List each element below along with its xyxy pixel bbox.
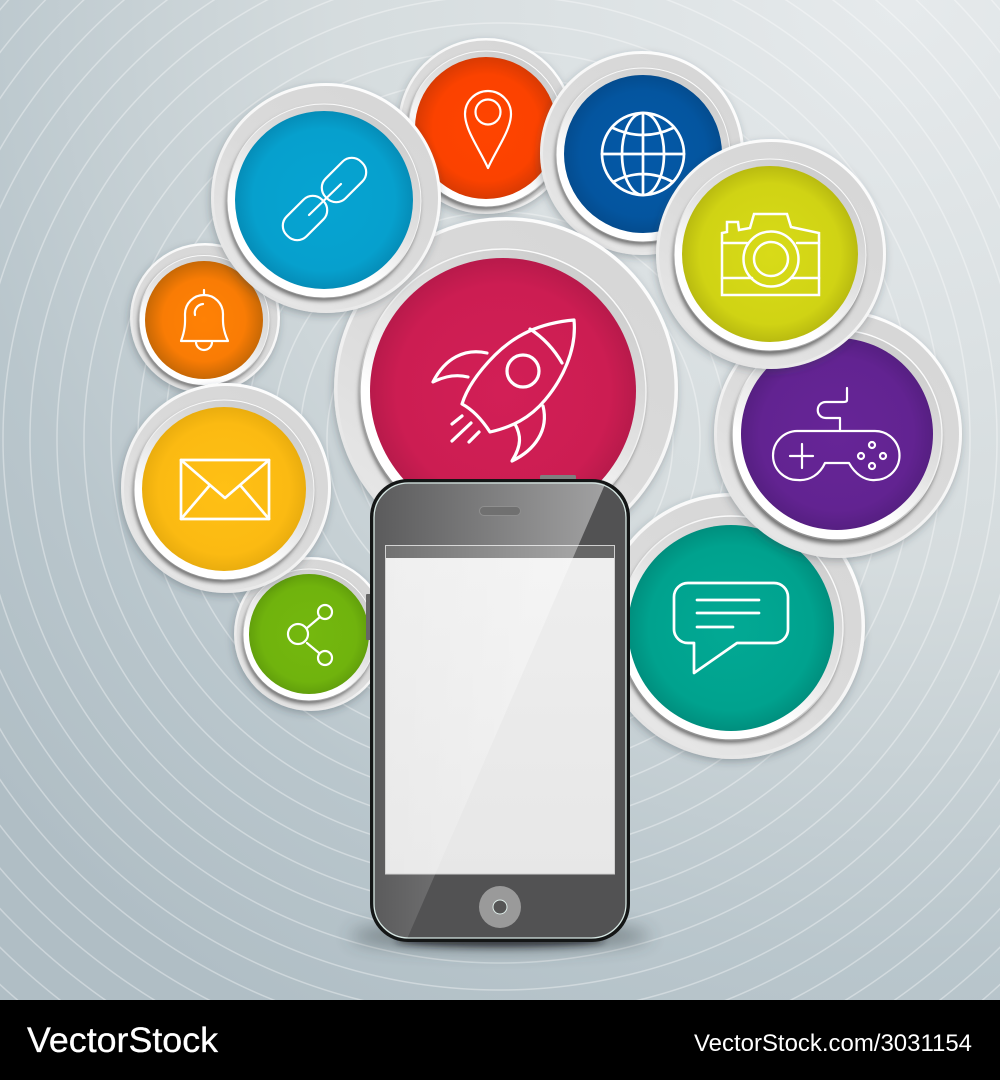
camera disc	[656, 139, 886, 369]
icon: gamepad	[773, 388, 900, 480]
phone screen	[385, 545, 615, 874]
icon: share nodes	[288, 605, 332, 665]
icon: chain link	[277, 152, 372, 246]
share disc	[234, 557, 388, 711]
icon: bell	[181, 290, 228, 350]
image reference url: VectorStock.com/3031154	[694, 1030, 972, 1057]
phone inner edge highlight	[374, 483, 626, 938]
icon: map pin	[465, 91, 511, 168]
chat disc	[599, 493, 865, 759]
smartphone	[366, 475, 630, 942]
location pin disc	[398, 38, 574, 214]
phone shadow	[350, 922, 650, 950]
mail disc	[121, 383, 331, 593]
rocket disc	[334, 217, 678, 561]
icon: envelope	[181, 460, 269, 519]
icon: speech bubble	[674, 583, 788, 673]
brand wordmark: VectorStock	[27, 1021, 219, 1060]
icon: rocket	[433, 320, 574, 461]
phone body	[370, 479, 630, 942]
icon: camera	[722, 214, 819, 295]
screen gloss reflection	[373, 482, 606, 939]
icon: globe	[602, 113, 684, 195]
phone side buttons	[366, 475, 576, 640]
globe disc	[540, 51, 744, 255]
bell disc	[130, 243, 280, 393]
speaker grille	[480, 506, 520, 516]
footer band	[0, 1000, 1000, 1080]
home button	[479, 886, 521, 928]
game controller disc	[714, 310, 962, 558]
link disc	[211, 83, 441, 313]
